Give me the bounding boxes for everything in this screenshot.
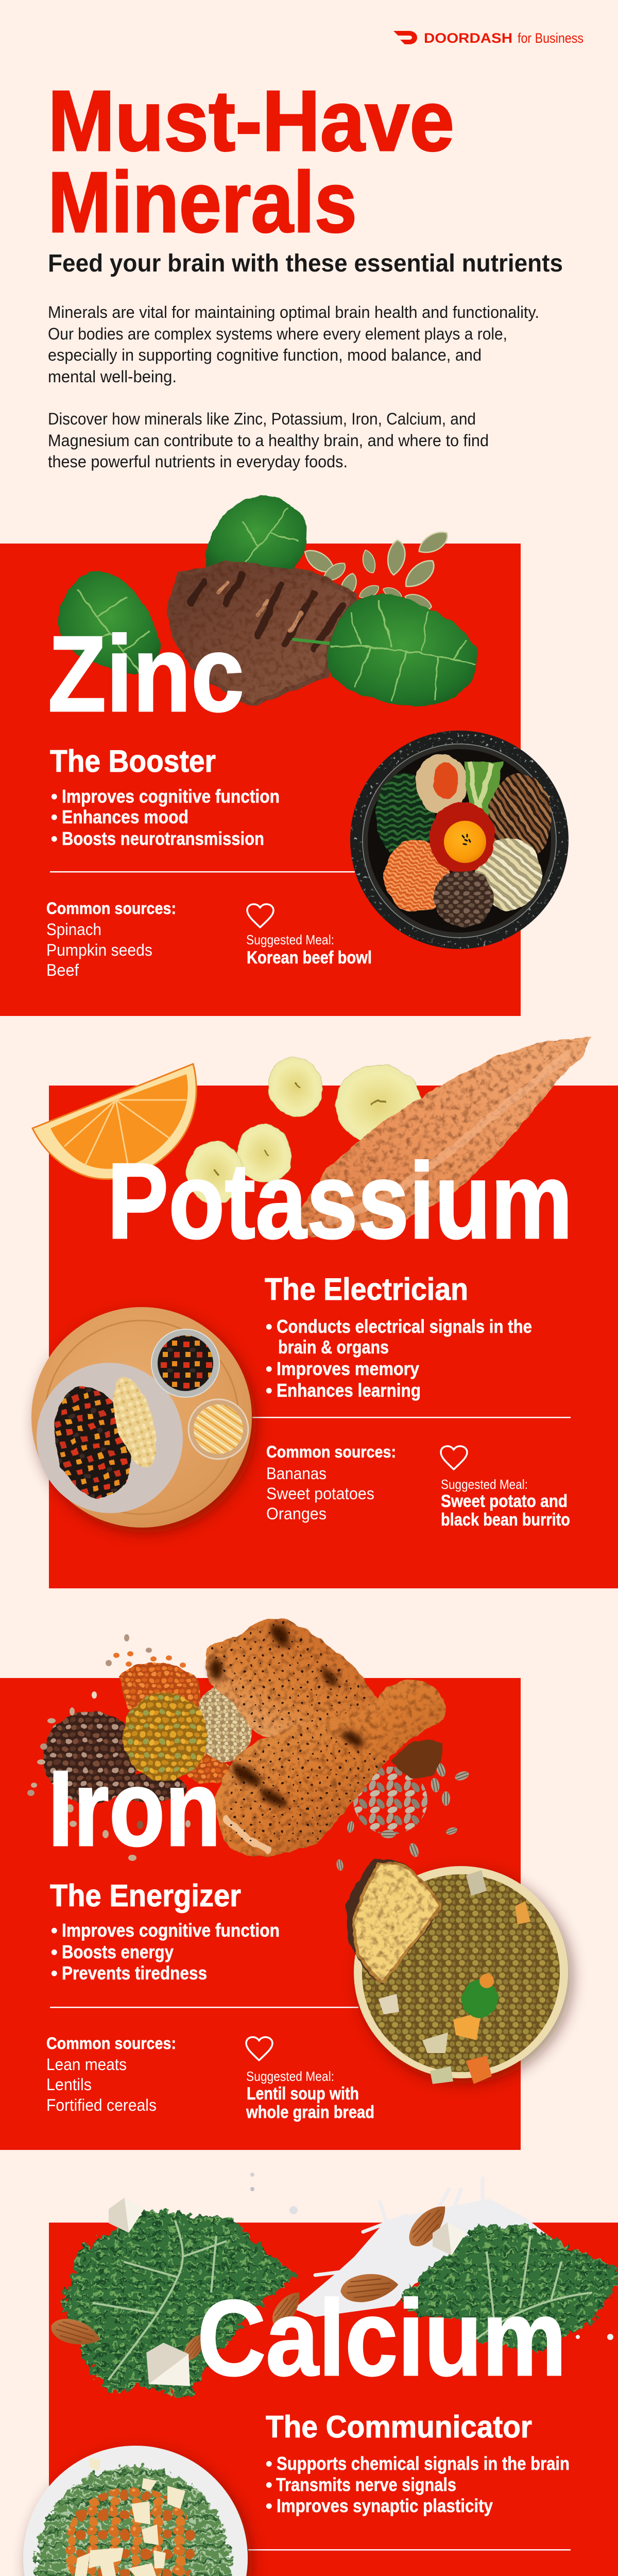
benefits zinc: • (51, 806, 58, 827)
benefits potassium: Enhances learning (277, 1380, 421, 1401)
benefits calcium: • (266, 2474, 272, 2495)
food collage: kale, tofu, almonds, milk (48, 2173, 618, 2403)
benefits potassium: Conducts electrical signals in the (277, 1316, 532, 1337)
benefits zinc: • (51, 828, 58, 849)
orange wedge (32, 1064, 196, 1179)
intro text: Minerals are vital for maintaining optimal brain health and functionality. (48, 303, 539, 321)
panel: zinc (0, 495, 569, 1016)
common sources zinc: Spinach (46, 920, 101, 939)
benefits potassium: Improves memory (277, 1358, 419, 1379)
role iron: The Energizer (50, 1878, 241, 1913)
common sources zinc: Beef (46, 961, 79, 979)
intro text: Our bodies are complex systems where every element plays a role, (48, 325, 507, 343)
suggested meal zinc: Suggested Meal: (246, 932, 334, 947)
suggested meal potassium (441, 1477, 570, 1530)
milk splash (250, 2173, 613, 2340)
header: logo, title and intro (48, 30, 583, 471)
intro text: Discover how minerals like Zinc, Potassium, Iron, Calcium, and (48, 410, 476, 428)
divider iron (50, 2007, 358, 2008)
divider calcium (248, 2549, 571, 2550)
benefits calcium: • (266, 2453, 272, 2474)
suggested meal zinc: Korean beef bowl (247, 948, 372, 968)
intro text: these powerful nutrients in everyday foods. (48, 452, 348, 471)
spinach leaf right (294, 594, 478, 706)
benefits potassium: • (266, 1316, 272, 1337)
benefits calcium: Transmits nerve signals (276, 2474, 456, 2495)
intro text: Magnesium can contribute to a healthy brain, and where to find (48, 431, 489, 450)
lentil piles (43, 1663, 253, 1804)
suggested meal iron (246, 2069, 374, 2122)
chicken thigh (205, 1619, 379, 1737)
benefits potassium: brain & organs (278, 1336, 389, 1358)
benefits zinc: Enhances mood (62, 806, 188, 827)
logo suffix: for Business (518, 30, 583, 46)
spinach leaf top (206, 495, 307, 577)
spinach leaf left (58, 570, 161, 674)
benefits potassium: • (266, 1380, 272, 1401)
role potassium: The Electrician (265, 1272, 468, 1307)
benefits iron: Prevents tiredness (62, 1962, 207, 1984)
suggested meal iron: whole grain bread (246, 2103, 374, 2122)
common sources iron: Lean meats (46, 2055, 127, 2074)
common sources potassium: Common sources: (266, 1443, 396, 1461)
common sources iron: Common sources: (46, 2034, 176, 2053)
benefits calcium: • (266, 2495, 272, 2516)
sweet potato (291, 1036, 591, 1237)
kale right (400, 2225, 618, 2352)
tofu cubes (109, 2198, 467, 2403)
sunflower seeds (336, 1761, 470, 1871)
meal photo: kale Caesar salad (23, 2446, 571, 2576)
benefits calcium: Supports chemical signals in the brain (277, 2453, 570, 2474)
common sources zinc: Common sources: (46, 899, 176, 918)
zinc background (0, 544, 521, 1016)
icon: heart zinc (247, 904, 273, 927)
common sources iron: Fortified cereals (46, 2096, 157, 2114)
calcium background (49, 2223, 618, 2576)
title: Must-Have (48, 73, 454, 169)
heading calcium: Calcium (197, 2278, 566, 2398)
icon: heart iron (246, 2037, 272, 2060)
benefits iron: • (51, 1962, 58, 1984)
role zinc: The Booster (50, 744, 216, 778)
meal photo: lentil soup (50, 1859, 568, 2084)
intro text: mental well-being. (48, 367, 177, 386)
suggested meal potassium: Sweet potato and (441, 1492, 568, 1511)
parmesan shards (67, 2458, 195, 2576)
role calcium: The Communicator (266, 2410, 532, 2444)
suggested meal iron: Suggested Meal: (246, 2069, 334, 2084)
heading zinc: Zinc (48, 614, 244, 734)
common sources iron: Lentils (46, 2075, 92, 2094)
logo wordmark: DOORDASH (424, 30, 512, 46)
subtitle: Feed your brain with these essential nutrients (48, 250, 563, 277)
heading iron: Iron (48, 1749, 221, 1869)
panel: potassium (26, 1037, 618, 1588)
meal photo: Korean beef bowl (50, 731, 569, 949)
benefits iron: Boosts energy (62, 1941, 174, 1962)
logo: DoorDash for Business (393, 30, 583, 46)
food collage: spinach, beef, pumpkin seeds (58, 495, 478, 706)
benefits potassium (266, 1316, 532, 1401)
common sources iron (46, 2034, 176, 2114)
kale left (61, 2209, 298, 2399)
soup vegetables (379, 1870, 530, 2084)
divider zinc (50, 871, 355, 873)
potassium background (49, 1086, 618, 1588)
chicken drumstick (215, 1680, 445, 1857)
title: Minerals (48, 155, 357, 250)
beef steak (167, 562, 357, 705)
benefits calcium (266, 2453, 570, 2516)
banana slices (187, 1052, 422, 1204)
panel: calcium (18, 2173, 618, 2576)
intro text (48, 303, 539, 471)
benefits calcium: Improves synaptic plasticity (277, 2495, 493, 2516)
benefits zinc: Improves cognitive function (62, 786, 280, 807)
food collage: lentils, chicken, seeds (27, 1619, 470, 1871)
benefits iron: Improves cognitive function (62, 1920, 280, 1941)
title (48, 73, 454, 250)
bread (345, 1859, 441, 1985)
scattered lentils (27, 1634, 191, 1861)
pumpkin seeds (301, 529, 452, 615)
benefits iron (51, 1920, 280, 1984)
icon: heart potassium (441, 1446, 467, 1469)
benefits potassium: • (266, 1358, 272, 1379)
icon: DoorDash wing (393, 31, 417, 44)
common sources potassium: Oranges (266, 1504, 327, 1523)
panel: iron (0, 1618, 582, 2150)
meal photo: sweet potato and black bean burrito (27, 1307, 571, 1528)
common sources potassium (266, 1443, 396, 1523)
suggested meal iron: Lentil soup with (247, 2084, 359, 2104)
divider potassium (252, 1417, 571, 1418)
common sources zinc (46, 899, 176, 979)
benefits zinc: • (51, 786, 58, 807)
benefits iron: • (51, 1920, 58, 1941)
suggested meal potassium: Suggested Meal: (441, 1477, 528, 1492)
benefits zinc (51, 786, 280, 849)
benefits zinc: Boosts neurotransmission (62, 828, 264, 849)
common sources potassium: Sweet potatoes (266, 1484, 374, 1503)
suggested meal potassium: black bean burrito (441, 1510, 570, 1530)
benefits iron: • (51, 1941, 58, 1962)
common sources zinc: Pumpkin seeds (46, 941, 152, 959)
food collage: orange, banana, sweet potato (32, 1036, 591, 1237)
common sources potassium: Bananas (266, 1464, 327, 1483)
intro text: especially in supporting cognitive function, mood balance, and (48, 346, 482, 364)
almonds (48, 2198, 453, 2364)
iron background (0, 1678, 521, 2150)
suggested meal zinc (246, 932, 372, 968)
